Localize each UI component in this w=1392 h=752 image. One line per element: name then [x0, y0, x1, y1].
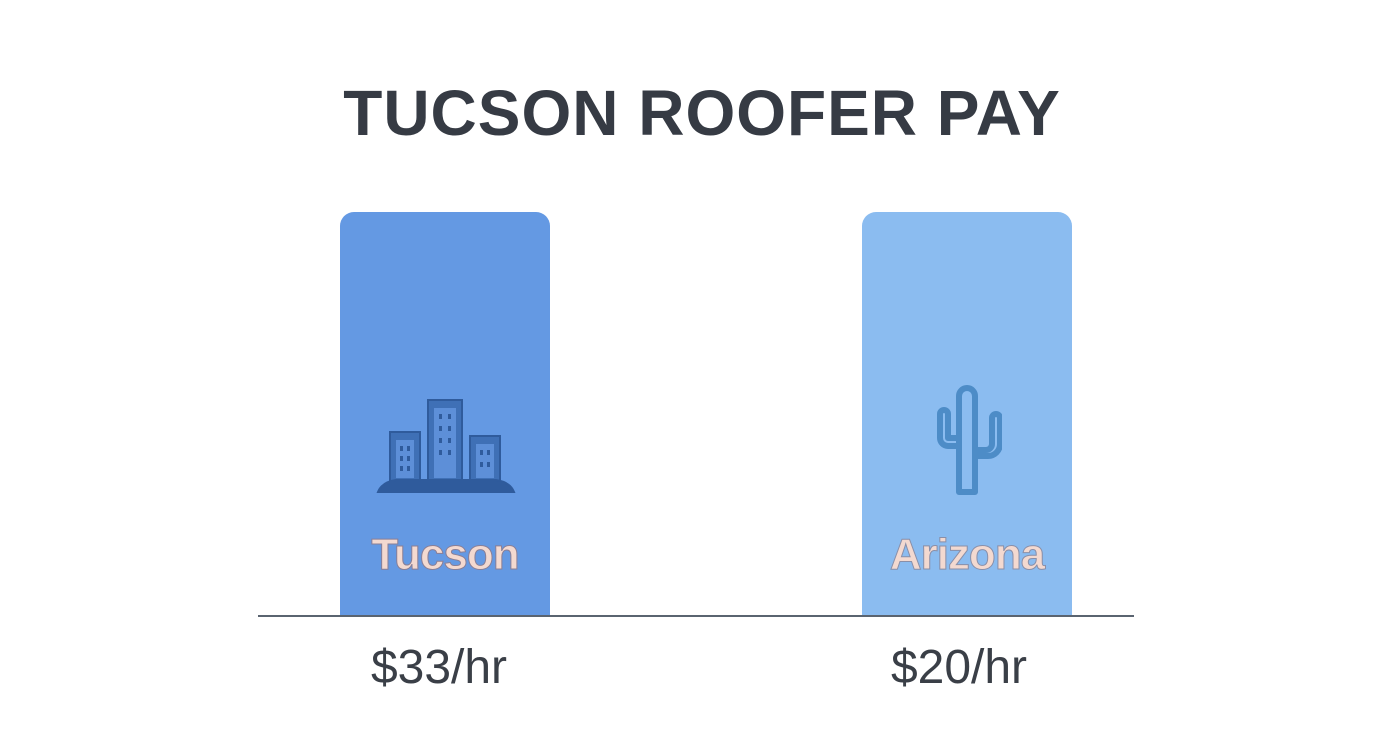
axis line	[258, 615, 1134, 617]
icon: cactus	[937, 385, 1002, 495]
label: Arizona: Arizona	[890, 530, 1044, 579]
value: Arizona: $20/hr	[891, 641, 1027, 694]
bar: Arizona	[862, 212, 1072, 616]
icon: buildings	[376, 399, 516, 493]
value: Tucson: $33/hr	[371, 641, 507, 694]
title: TUCSON ROOFER PAY	[343, 77, 1061, 149]
bar: Tucson	[340, 212, 550, 616]
label: Tucson: Tucson	[371, 530, 519, 579]
